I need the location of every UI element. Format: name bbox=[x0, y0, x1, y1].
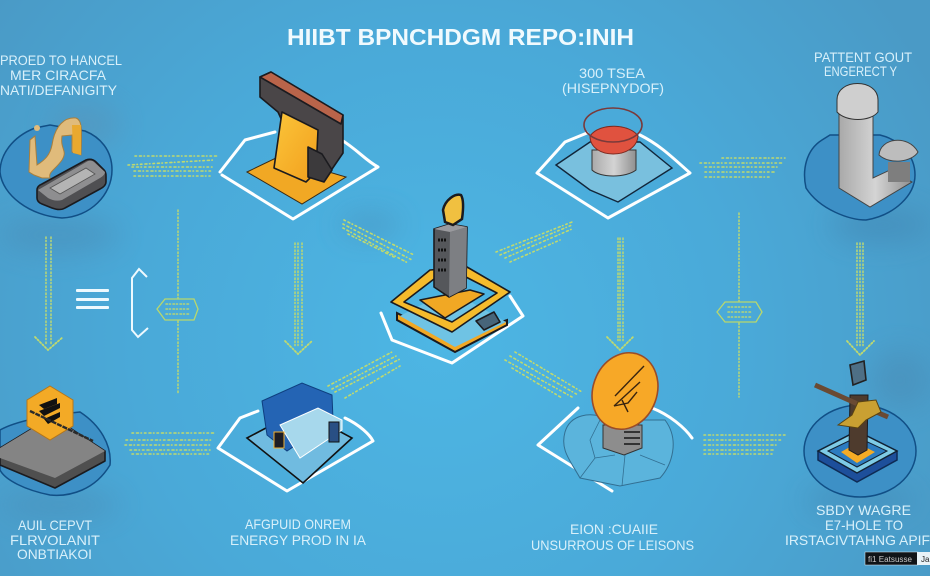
icon: connector rod bbox=[30, 411, 93, 441]
panel: bottom orange disc bbox=[538, 343, 692, 491]
icon: tower bbox=[434, 224, 467, 297]
label: bottom centre left bbox=[230, 516, 367, 548]
icon: dome bbox=[879, 140, 918, 161]
arrow: far right vertical bbox=[847, 243, 874, 355]
label: top right: PATTENT GOUT bbox=[814, 49, 912, 65]
icon: gold gears bbox=[838, 400, 881, 428]
icon: white frame bbox=[538, 408, 692, 491]
top left label: PROED TO HANCEL bbox=[0, 52, 122, 68]
icon: slab top edge bbox=[260, 72, 343, 124]
icon: cylinder slats bbox=[624, 432, 640, 444]
label: bottom left: AUIL CEPVT bbox=[18, 517, 92, 533]
label: top centre right: (HISEPNYDOF) bbox=[562, 80, 664, 96]
label: bottom left: FLRVOLANIT bbox=[10, 532, 100, 548]
top left label: MER CIRACFA bbox=[10, 67, 107, 83]
icon: orange base bbox=[420, 290, 484, 318]
icon: hexagon glyph bbox=[39, 398, 60, 424]
panel: top left hand device bbox=[0, 52, 122, 218]
icon: camera top bbox=[850, 361, 866, 385]
icon: tower sign bbox=[443, 195, 463, 225]
icon: white frame bbox=[537, 133, 690, 218]
icon: blue ring bbox=[804, 405, 916, 497]
icon: disc glyph bbox=[614, 366, 644, 412]
watermark badge: fi1 Eatsusse bbox=[868, 555, 913, 564]
label: bottom right bbox=[785, 502, 930, 548]
icon: grey cylinder bbox=[592, 150, 636, 176]
panel: top black and orange block bbox=[220, 72, 378, 219]
icon: cylinder bbox=[603, 425, 642, 455]
arrow: centre right vertical bbox=[607, 238, 633, 350]
icon: grey keypad base bbox=[37, 159, 106, 210]
arrow: left vertical bbox=[35, 237, 63, 350]
icon: white outline frame bbox=[220, 132, 378, 219]
icon: glass plate bbox=[556, 142, 672, 202]
icon: yellow frame bbox=[391, 267, 510, 332]
arrow: bottom left horizontal dotted band bbox=[125, 433, 214, 454]
arrow: top right horizontal dotted band bbox=[700, 158, 785, 177]
icon: stands bbox=[280, 408, 342, 458]
arrow: second vertical line with badge bbox=[157, 210, 198, 393]
label: bottom centre left: AFGPUID ONREM bbox=[245, 516, 351, 532]
icon: black slab bbox=[260, 72, 343, 172]
icon: side sign bbox=[329, 422, 339, 442]
icon: base inner square bbox=[828, 437, 887, 467]
top left label bbox=[0, 52, 122, 98]
panel: top right tower bbox=[805, 49, 918, 220]
label: bottom left: ONBTIAKOI bbox=[17, 546, 92, 562]
label: top centre right: 300 TSEA bbox=[579, 65, 646, 81]
panel: bottom blue building bbox=[218, 383, 373, 491]
icon: clamps bbox=[308, 147, 332, 182]
icon: orange base bbox=[247, 157, 346, 204]
arrow: centre left vertical bbox=[285, 243, 312, 354]
arrow: diagonal bottom left to centre bbox=[328, 352, 400, 398]
panel: centre tower bbox=[381, 195, 523, 363]
icon: plate top bbox=[400, 290, 506, 347]
icon: plate cracks bbox=[580, 420, 665, 486]
icon: plate bbox=[247, 410, 352, 483]
icon: small dark door bbox=[274, 432, 284, 448]
icon: slab top bbox=[0, 428, 105, 478]
label: bottom right: E7-HOLE TO bbox=[825, 517, 903, 533]
arrow: diagonal top right to centre bbox=[496, 222, 572, 262]
icon: glass plate bbox=[564, 415, 673, 486]
label: bottom centre right: EION :CUAIIE bbox=[570, 521, 658, 537]
arrow: bottom right horizontal dotted band bbox=[704, 435, 785, 454]
icon: yellow pillar bbox=[274, 112, 318, 182]
arrow: diagonal bottom right to centre bbox=[505, 352, 582, 398]
label: bottom centre left: ENERGY PROD IN IA bbox=[230, 532, 367, 548]
panel: bottom left gold hexagon bbox=[0, 386, 110, 495]
icon: blue ring bbox=[0, 125, 112, 218]
icon: pillar cap bbox=[837, 84, 878, 120]
panel: top red button bbox=[537, 108, 690, 218]
arrow: top left horizontal dotted band bbox=[128, 156, 218, 176]
icon: small device bbox=[476, 312, 500, 330]
label: top right: ENGERECT Y bbox=[824, 63, 898, 79]
label: bottom left bbox=[10, 517, 100, 562]
icon: orange centre bbox=[841, 443, 875, 463]
icon: stacked base bbox=[818, 431, 897, 482]
icon: grey slab bbox=[0, 428, 105, 488]
icon: tower mast bbox=[849, 395, 868, 455]
label: bottom right: IRSTACIVTAHNG APIF bbox=[785, 532, 930, 548]
icon: base top bbox=[818, 431, 897, 473]
icon: ring bbox=[584, 108, 642, 142]
title: HIIBT BPNCHDGM REPO:INIH bbox=[287, 24, 634, 50]
icon: blue wall bbox=[262, 383, 333, 451]
panel: bottom right machine bbox=[804, 361, 916, 497]
arrow: right vertical line with badge bbox=[717, 213, 762, 397]
icon: tan hand bbox=[29, 118, 81, 178]
icon: base plate bbox=[397, 313, 507, 352]
watermark badge bbox=[865, 552, 930, 565]
icon: red bowl bbox=[590, 126, 638, 154]
top left label: NATI/DEFANIGITY bbox=[0, 82, 118, 98]
watermark badge: Ja bbox=[921, 555, 930, 564]
icon: gold hexagon bbox=[27, 386, 73, 440]
icon: orange disc bbox=[582, 343, 668, 439]
menu icon bbox=[76, 289, 109, 309]
icon: blue ring bbox=[0, 412, 110, 495]
label: bottom right: SBDY WAGRE bbox=[816, 502, 911, 518]
bracket icon bbox=[132, 269, 148, 337]
icon: pillar bbox=[839, 110, 912, 207]
label: bottom centre right: UNSURROUS OF LEISONS bbox=[531, 537, 694, 553]
label: bottom centre right bbox=[531, 521, 694, 553]
icon: white frame bbox=[218, 411, 373, 491]
icon: white frame bbox=[381, 296, 523, 363]
icon: dome support bbox=[888, 162, 910, 182]
label: top centre right bbox=[562, 65, 664, 96]
icon: left arm bbox=[815, 385, 888, 417]
icon: blue ring bbox=[805, 135, 915, 220]
label: top right bbox=[814, 49, 912, 79]
arrow: diagonal top left to centre bbox=[343, 220, 414, 263]
